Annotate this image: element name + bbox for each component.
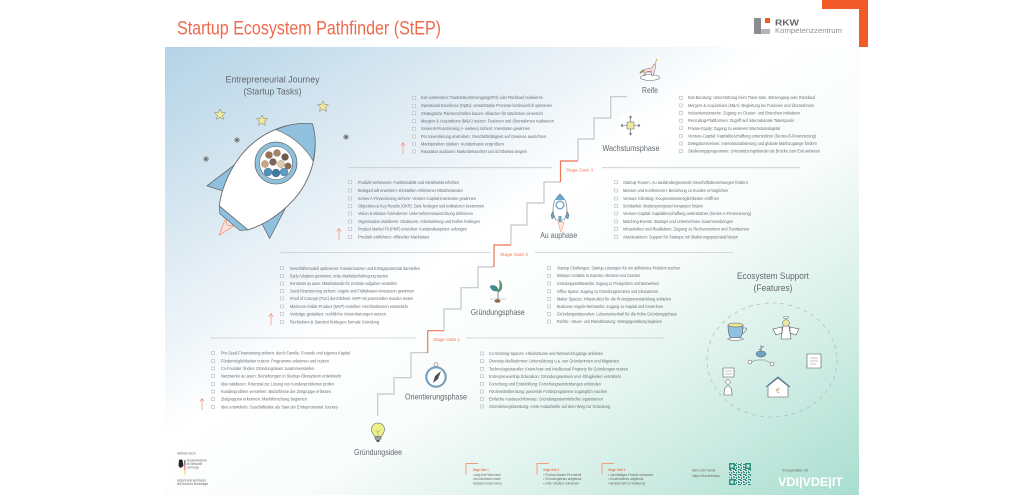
support list: Aufbauphase: Akzeleratoren: Support für Startups mit Skalierungspotenzial bieten [623,234,738,240]
support list: Orientierungsphase [480,351,628,409]
arrow: Reife tasks [401,142,405,154]
phase label: Wachstumsphase: Wachstumsphase [602,143,660,153]
support list: Gründungsphase [548,266,680,324]
support list: Orientierungsphase: Forschung und Entwicklung: Forschungseinrichtungen einbinden [489,381,601,386]
support list: Aufbauphase [614,180,751,240]
task list: Orientierungsphase: Zielgruppen erkennen: Marktforschung beginnen [221,396,307,402]
task list: Reife: Series-B-Finanzierung (+ weitere) sichern: Investoren gewinnen [421,126,530,131]
support list: Orientierungsphase: Entrepreneurship Education: Gründungswissen und -fähigkeiten vermitteln [489,374,622,379]
task list: Wachstumsphase [348,180,484,240]
support list: Gründungsphase: Maker Spaces: Infrastruktur für die Prototypenentwicklung anbieten [557,296,671,301]
task list: Wachstumsphase: Objectives & Key Results (OKR): Ziele festlegen und Indikatoren bestimmen [358,204,484,208]
legend: stage gate 1: • erste Kundeninteressen vorhanden [473,477,501,481]
title: Startup Ecosystem Pathfinder (StEP) [177,18,441,40]
task list: Reife: Reputation ausbauen: Markenbekanntheit und Sichtbarkeit steigern [421,149,527,154]
ecosystem support cluster [707,303,837,417]
task list: Gründungsphase: Seed-Finanzierung sichern: Angels und Frühphasen-Investoren gewinnen [290,288,414,294]
icon: large rocket [188,98,344,261]
task list: Reife: Exit vorbereiten: TradeSale,Börsengang(IPO) oder Rückkauf realisieren [421,95,543,100]
funding note and ministry logo: für Wirtschaft [187,462,202,466]
logo: RKW Kompetenzzentrum: RKW [775,18,800,28]
icon: house with euro: € [776,388,780,395]
icon: small rocket [551,194,569,232]
support list: Aufbauphase: Venture-Capital: Kapitalbeschaffung unterstützen (Series-A-Finanzierung) [623,211,751,216]
task list: Gründungsphase: Geschäftsmodell optimieren: Kundennutzen und Ertragspotenzial darstellen [290,266,420,271]
support list: Orientierungsphase: Diversity-Maßnahmen: Unterstützung u.a. von Gründerinnen und Migranten [489,358,619,364]
legend: stage gate 1: Stage Gate 1 [473,468,489,472]
icon: coffee cup [728,323,746,340]
icon: light document [807,354,821,368]
icon: growth arrows [619,114,642,137]
legend: stage gate 1 [466,464,502,486]
task list: Wachstumsphase: Organisation etablieren: Strukturen, Arbeitsteilung und Rollen festlegen [358,219,480,224]
legend: stage gate 2: • Gründungsteam aufgebaut [543,477,581,481]
support list: Reife: Delegationsreisen: Internationalisierung und globale Marktzugänge fördern [688,141,817,146]
arrow: Wachstumsphase tasks [337,228,341,240]
legend: stage gate 2: • Product Market Fit erreicht [543,473,581,477]
support list: Orientierungsphase: Fördermittelberatung: passende Förderprogramme zugänglich machen [489,389,607,394]
support list: Aufbauphase: Startup-Touren: Au ausländergiesende Geschäftsbeziehungen fördern [623,180,749,185]
dashed circle [707,303,837,417]
cooperation partner logo: VDI|VDE|IT [778,477,843,489]
heading: ecosystem support [737,271,809,293]
support list: Gründungsphase: Meetups: Kontakte zu Experten, Mentoren und Coaches [557,273,641,278]
support list: Reife [680,95,820,154]
background panel [165,47,859,495]
support list: Orientierungsphase: Einfache Austauschformate: Gründungsstammtische organisieren [489,396,603,402]
support list: Reife: Recruiting-Plattformen: Zugriff auf internationale Talentpools [688,118,795,123]
more info link: https://rkw.link/step [692,474,720,478]
support list: Orientierungsphase: Technologietransfer: Know-how und Intellectual Property für Gründungen nutzen [489,366,628,371]
support list: Gründungsphase: Gründungsstipendien: Lebensunterhalt für die frühe Gründungsphase [557,312,677,316]
support list: Gründungsphase: Office Space: Zugang zu Gründungszentren und Inkubatoren [557,289,658,294]
task list: Reife: Marktposition stärken: Kundenbasis vergrößern [421,142,505,146]
task list: Wachstumsphase: Produkt einführen: offizieller Marktstart [358,234,430,240]
legend: stage gate 1: • Bereitschaft zur formalen Gründung [473,482,502,486]
support list: Reife: Private-Equity: Zugang zu weiterem Wachstumskapital [688,126,780,131]
arrow: Orientierungsphase tasks [200,398,204,410]
task list: Orientierungsphase: Idee validieren: Potenzial zur Lösung von Kundenproblemen prüfen [221,382,334,386]
legend: stage gate 3 [602,464,653,486]
corner mark [822,0,868,47]
task list: Wachstumsphase: Vision & Mission formulieren: Unternehmensausrichtung definieren [358,211,473,216]
task list: Gründungsphase: Proof of Concept (PoC) durchführen: MVP mit potenziellen Kunden testen [290,296,413,301]
support list: Reife: Exit-Beratung: Unterstützung beim Trade Sale, Börsengang oder Rückkauf [688,95,816,100]
icon: seedling [490,280,506,303]
cooperation partner logo [778,468,843,489]
icon: compass [426,362,446,388]
task list: Gründungsphase: Kernteam au auen: Mitarbeitende für zentrale Aufgaben einstellen [290,281,397,286]
legend: stage gate 2: • erste Umsätze vorhanden [543,482,579,486]
icon: unicorn on cloud [640,59,660,80]
task list: Gründungsphase: Verträge gestalten: rechtliche Vereinbarungen setzen [290,312,387,316]
task list: Orientierungsphase: Kundenproblem verstehen: Bedürfnisse der Zielgruppe erfassen [221,389,331,394]
task list: Wachstumsphase: Series-A-Finanzierung sichern: Venture-Capital-Investoren gewinnen [358,196,476,201]
support list: Gründungsphase: Startup Challenges: Startup-Lösungen für ein definiertes Problem suchen [557,266,680,270]
stage gate labels: Stage Gate 3 [566,168,593,172]
task list: Wachstumsphase: Belegschaft erweitern: Einstellen erfahrener Mitarbeitender [358,188,463,193]
task list: Reife: Operational Excellence (OpEx): umsatzstarke Prozesse kontinuierlich optimieren [421,103,552,108]
stars around rocket [203,101,349,162]
legend: stage gate 1: • Lösung für ein Problem erkannt [473,473,501,477]
support list: Gründungsphase: Business-Angels-Netzwerke: Zugang zu Kapital und Know-how [557,304,664,309]
phase label: Reife: Reife [642,85,658,95]
icon: angel [773,317,799,339]
legend: stage gate 2 [537,464,581,486]
logo: RKW Kompetenzzentrum [754,18,842,35]
task list: Orientierungsphase: Pre-Seed-Finanzierung sichern: durch Familie, Freunde und eigenes Kapital [221,350,350,356]
task list: Reife: Mergers & Acquisitions (M&A) nutzen: Fusionen und Übernahmen realisieren [421,118,554,124]
task list: Orientierungsphase [212,350,350,410]
funding note and ministry logo: und Energie [187,466,199,470]
more info link [692,468,720,478]
support list: Aufbauphase: Venture Clienting: Kooperationsmöglichkeiten eröffnen [623,196,719,201]
task list: Orientierungsphase: Netzwerke au auen: Beziehungen in Startup-Ökosystem entwickeln [221,374,342,378]
phase label: Orientierungsphase: Orientierungsphase [405,392,467,402]
heading: ecosystem support: Ecosystem Support [737,271,809,281]
heading: entrepreneurial journey: Entrepreneurial Journey [226,74,320,84]
staircase path [378,97,627,416]
funding note and ministry logo: Bundesministerium [187,458,207,462]
funding note and ministry logo: des Deutschen Bundestages [177,482,208,486]
task list: Reife: Pro toiventierung anstreben: Geschäftstätigkeit auf Gewinne ausrichten [421,134,546,139]
support list: Aufbauphase: Messen und Konferenzen: Beziehung zu Kunden ermöglichen [623,188,728,193]
legend: stage gate 2: Stage Gate 2 [543,468,559,472]
icon: document and person [723,368,734,395]
support list: Gründungsphase: Rechts-, Steuer- und Patentberatung: Vertragsgestaltung begleiten [557,319,662,324]
task list: Wachstumsphase: Product Market Fit (PMF) erreichen: Kundenakzeptanz aufzeigen [358,226,467,232]
icon: light bulb [372,423,384,442]
stage gate dividers [210,168,800,338]
legend: stage gate 3: • Bereitschaft zur Skalierung [608,482,645,486]
support list: Aufbauphase: Infrastruktur und Reallabore: Zugang zu Rechenzentren und Testräumen [623,226,749,232]
stage gate labels: Stage Gate 1 [433,337,460,342]
task list: Wachstumsphase: Produkt verbessern: Funktionalität und Attraktivität erhöhen [358,180,459,185]
phase label: Gründungsphase: Gründungsphase [471,307,525,317]
support list: Orientierungsphase: Orientierungsberatung: erste Anlaufstelle auf dem Weg zur Gründung [489,404,610,409]
task list: Orientierungsphase: Fördermöglichkeiten nutzen: Programme erkennen und nutzen [221,358,329,364]
support list: Reife: Venture-Capital: Kapitalbeschaffung unterstützen (Series-B-Finanzierung) [688,134,816,138]
support list: Orientierungsphase: Co-Working-Spaces: Arbeitsräume und Netzwerkzugänge anbieten [489,351,603,356]
task list: Gründungsphase: Early Adopters gewinnen: erste Marktdurchdringung starten [290,274,388,278]
cooperation partner logo: In Kooperation mit [782,468,808,472]
task list: Orientierungsphase: Co-Founder: finden: Gründungsteam zusammenstellen [221,366,314,371]
stage gate labels: Stage Gate 2 [500,252,528,257]
support list: Reife: Industrienetzwerke: Zugang zu Cluster- und Branchen-Initiativen [688,110,800,116]
task list: Gründungsphase: Minimum Viable Product (MVP) erstellen: Kernfunktionen entwickeln [290,304,408,309]
task list: Reife: Strategische Partnerschaften bauen: Allianzen für Wachstum einsetzen [421,111,543,116]
QR code [729,463,751,485]
support list: Aufbauphase: Matching-Events: Startups und Unternehmen zusammenbringen [623,219,733,224]
support list: Gründungsphase: Gründungswettbewerbe: Zugang zu Preisgeldern und Netzwerken [557,281,659,286]
support list: Reife: Mergers & Acquisitions (M&A): Begleitung bei Fusionen und Übernahmen [688,103,814,108]
task list: Gründungsphase [280,266,420,324]
icon: network plant [748,345,774,366]
funding note and ministry logo: Gefördert durch: [177,452,196,456]
legend: stage gate 3: • Kundenstamm aufgebaut [608,477,643,481]
arrow: Gründungsphase tasks [269,314,273,325]
logo: RKW Kompetenzzentrum: Kompetenzzentrum [775,28,842,35]
legend: stage gate 3: Stage Gate 3 [608,468,625,472]
support list: Reife: Skalierungsprogramme: Unterstützungsbündel als Brücke zum Exit anbieten [688,149,820,154]
more info link: Mehr zum Thema: [692,468,716,472]
heading: entrepreneurial journey [226,74,320,96]
support list: Aufbauphase: Sichtbarkeit: Mediensynergieziel-kompetenz fördern [623,204,703,208]
funding note and ministry logo: aufgrund eines Beschlusses [177,478,206,482]
phase label: Au auphase: Au auphase [540,230,577,240]
heading: ecosystem support: (Features) [754,283,792,293]
task list: Orientierungsphase: Idee entwickeln: Geschäftsidee als Start der Entrepreneurial Journey [221,404,339,410]
phase label: Gründungsidee: Gründungsidee [354,447,402,457]
task list: Reife [412,95,554,154]
funding note and ministry logo [177,452,208,486]
task list: Gründungsphase: Rechtsform & Standort festlegen: formale Gründung [290,320,379,324]
legend: stage gate 3: • nachhaltiges Produkt vorhanden [608,473,653,477]
heading: entrepreneurial journey: (Startup Tasks) [244,86,302,96]
stage gate labels [433,168,593,342]
